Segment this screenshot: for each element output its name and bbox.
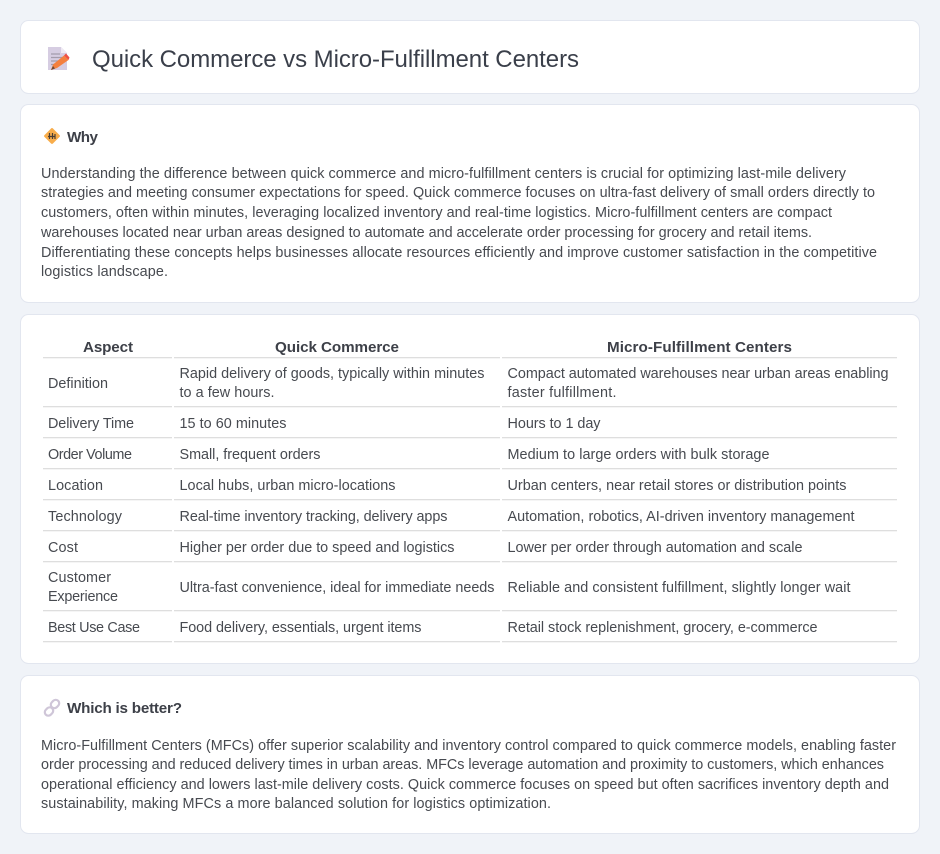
row: order volume <box>48 447 770 463</box>
text block: why paragraph: strategies and meeting consumer expectations for speed. Quick commerce focuses on ultra-fast delivery of small orders directly to <box>41 185 875 201</box>
table header row: Quick Commerce <box>275 339 399 356</box>
row: definition: Compact automated warehouses near urban areas enabling <box>508 366 888 382</box>
text block: why paragraph: warehouses located near urban areas designed to automate and accelerate order processing for grocery and retail items. <box>40 225 812 241</box>
row: location: Urban centers, near retail stores or distribution points <box>508 478 846 494</box>
row: technology: Real-time inventory tracking, delivery apps <box>180 509 448 525</box>
text block: why paragraph <box>40 166 877 280</box>
row: customer experience: Ultra-fast convenience, ideal for immediate needs <box>180 580 494 596</box>
row: best use case: Best Use Case <box>48 620 140 636</box>
text block: why paragraph: customers, often within minutes, leveraging localized inventory and real-time logistics. Micro-fulfillment centers are compact <box>41 205 832 221</box>
text block: why paragraph: Understanding the difference between quick commerce and micro-fulfillment centers is crucial for optimizing last-mile delivery <box>41 166 847 182</box>
row: definition: Definition <box>48 376 108 392</box>
text block: which is better paragraph: order processing and reduced delivery times in urban areas. MFCs leverage automation and proximity to customers, which enhances <box>41 757 884 773</box>
row: cost: Cost <box>48 540 78 556</box>
row: technology: Automation, robotics, AI-driven inventory management <box>508 509 854 525</box>
row: definition: Rapid delivery of goods, typically within minutes <box>180 366 484 382</box>
row: definition <box>48 366 888 401</box>
panel: why <box>20 104 920 302</box>
row: technology: Technology <box>48 509 123 525</box>
row: technology <box>48 509 854 525</box>
row: location <box>48 478 846 494</box>
row: location: Local hubs, urban micro-locations <box>180 478 396 494</box>
row: customer experience: Experience <box>48 589 118 605</box>
row: delivery time: Hours to 1 day <box>508 416 601 432</box>
row: location: Location <box>48 478 103 494</box>
row: delivery time <box>48 416 601 432</box>
heading: which is better: Which is better? <box>67 700 182 717</box>
row: customer experience: Reliable and consistent fulfillment, slightly longer wait <box>508 580 850 596</box>
row: delivery time: 15 to 60 minutes <box>180 416 286 432</box>
icon: link <box>43 698 61 717</box>
row: order volume: Medium to large orders with bulk storage <box>508 447 770 463</box>
text block: which is better paragraph: sustainability, making MFCs a more balanced solution for logistics optimization. <box>41 796 551 812</box>
row: best use case: Food delivery, essentials, urgent items <box>180 620 422 636</box>
row: cost: Higher per order due to speed and logistics <box>180 540 454 556</box>
row: best use case: Retail stock replenishment, grocery, e-commerce <box>508 620 818 636</box>
panel: header <box>20 20 920 94</box>
row: customer experience <box>48 570 850 605</box>
table header row <box>83 339 792 356</box>
panel: comparison table <box>20 314 920 664</box>
row: order volume: Order Volume <box>48 447 132 463</box>
table header row: Micro-Fulfillment Centers <box>607 339 792 356</box>
icon: construction diamond <box>44 128 60 144</box>
text block: which is better paragraph: Micro-Fulfillment Centers (MFCs) offer superior scalability and inventory control compared to quick commerce models, enabling faster <box>41 738 896 754</box>
heading: why: Why <box>67 129 99 146</box>
row: customer experience: Customer <box>48 570 111 586</box>
row: cost: Lower per order through automation and scale <box>508 540 802 556</box>
row: definition: to a few hours. <box>180 385 274 401</box>
icon: document with pencil <box>48 47 70 70</box>
text block: why paragraph: logistics landscape. <box>41 264 168 280</box>
text block: why paragraph: Differentiating these concepts helps businesses allocate resources efficiently and improve customer satisfaction in the competitive <box>41 245 877 261</box>
row: best use case <box>48 620 818 636</box>
panel: which is better <box>20 676 920 834</box>
row: cost <box>48 540 802 556</box>
row: order volume: Small, frequent orders <box>180 447 320 463</box>
text block: which is better paragraph <box>41 738 896 812</box>
row: definition: faster fulfillment. <box>508 385 616 401</box>
title: Quick Commerce vs Micro-Fulfillment Centers <box>92 46 579 73</box>
text block: which is better paragraph: operational efficiency and lowers last-mile delivery costs. Quick commerce focuses on speed but often sacrifices inventory depth and <box>41 777 889 793</box>
row: delivery time: Delivery Time <box>48 416 134 432</box>
table header row: Aspect <box>83 339 133 356</box>
